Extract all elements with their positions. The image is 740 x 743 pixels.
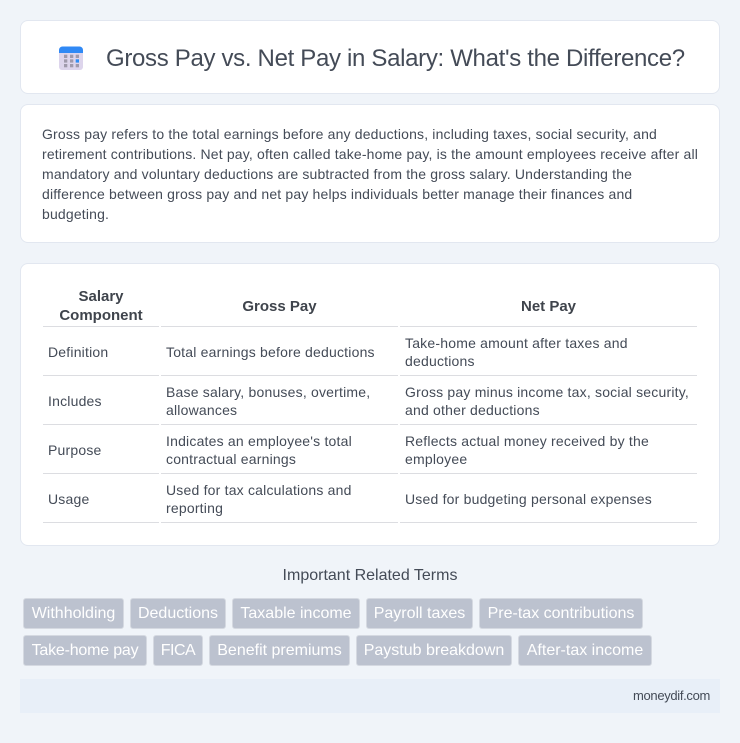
tag: fica <box>153 635 203 666</box>
tag: paystub breakdown <box>356 635 512 666</box>
tag list: related terms <box>23 598 652 666</box>
tag: withholding: Withholding <box>32 605 115 622</box>
panel: comparison table <box>20 263 720 546</box>
row: usage: Used for tax calculations and <box>166 482 352 498</box>
row: usage: Usage <box>48 491 89 507</box>
row: includes: Gross pay minus income tax, social security, <box>405 384 689 400</box>
text: introduction paragraph: difference between gross pay and net pay helps individuals better manage their finances and <box>42 186 632 202</box>
row: definition: Total earnings before deductions <box>166 344 375 360</box>
tag: paystub breakdown: Paystub breakdown <box>364 642 504 659</box>
tag: after-tax income <box>518 635 652 666</box>
table header: gross pay: Gross Pay <box>242 298 317 315</box>
row: includes: Base salary, bonuses, overtime, <box>166 384 370 400</box>
title: Gross Pay vs. Net Pay in Salary: What's the Difference? <box>106 45 685 72</box>
table header: net pay: Net Pay <box>521 298 576 315</box>
footer bar <box>20 679 720 713</box>
panel: introduction <box>20 104 720 243</box>
table header: salary component: Salary <box>78 288 124 305</box>
text: introduction paragraph: budgeting. <box>42 206 109 222</box>
tag: payroll taxes: Payroll taxes <box>374 605 465 622</box>
row: includes: and other deductions <box>405 402 540 418</box>
row: purpose: Purpose <box>48 442 102 458</box>
tag: benefit premiums: Benefit premiums <box>217 642 342 659</box>
heading: important related terms: Important Related Terms <box>283 567 457 584</box>
table header: salary component <box>59 288 143 324</box>
tag: deductions <box>130 598 226 629</box>
text: introduction paragraph <box>42 126 698 222</box>
row: definition: Take-home amount after taxes and <box>405 335 628 351</box>
text: introduction paragraph: retirement contributions. Net pay, often called take-home pay, is the amount employees receive after all <box>42 146 698 162</box>
row: usage <box>48 482 652 516</box>
tag: deductions: Deductions <box>138 605 218 622</box>
icon: calendar <box>59 46 83 70</box>
row: definition: Definition <box>48 344 108 360</box>
tag: payroll taxes <box>366 598 473 629</box>
tag: take-home pay: Take-home pay <box>32 642 138 659</box>
footer source text: moneydif.com <box>633 688 710 703</box>
tag: take-home pay <box>23 635 147 666</box>
tag: benefit premiums <box>209 635 350 666</box>
row: usage: Used for budgeting personal expenses <box>405 491 652 507</box>
row: definition <box>48 335 628 369</box>
tag: pre-tax contributions: Pre-tax contributions <box>488 605 634 622</box>
text: introduction paragraph: mandatory and voluntary deductions are subtracted from the gross salary. Understanding the <box>42 166 632 182</box>
row: purpose <box>48 433 649 467</box>
row: includes <box>48 384 689 418</box>
tag: fica: FICA <box>161 642 195 659</box>
row: purpose: Indicates an employee's total <box>166 433 352 449</box>
text: introduction paragraph: Gross pay refers to the total earnings before any deductions, including taxes, social security, and <box>42 126 657 142</box>
row: usage: reporting <box>166 500 223 516</box>
row: includes: Includes <box>48 393 102 409</box>
tag: taxable income <box>232 598 360 629</box>
tag: pre-tax contributions <box>479 598 643 629</box>
tag: taxable income: Taxable income <box>240 605 352 622</box>
row: purpose: Reflects actual money received by the <box>405 433 649 449</box>
row: includes: allowances <box>166 402 237 418</box>
table header: salary component: Component <box>59 307 143 324</box>
row: purpose: contractual earnings <box>166 451 296 467</box>
tag: withholding <box>23 598 124 629</box>
tag: after-tax income: After-tax income <box>527 642 643 659</box>
row: definition: deductions <box>405 353 475 369</box>
row: purpose: employee <box>405 451 467 467</box>
panel: header <box>20 20 720 94</box>
